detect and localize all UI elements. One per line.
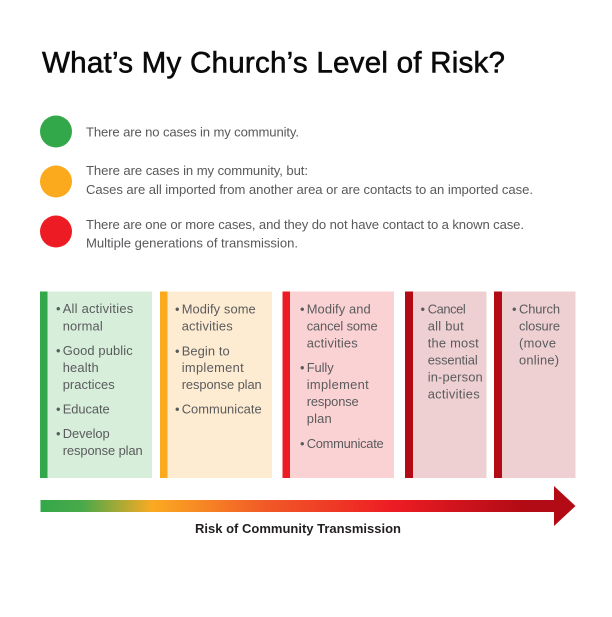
cancel panel list: Cancel <box>428 302 466 316</box>
closure panel list: online) <box>519 353 559 368</box>
legend: red level <box>40 216 524 251</box>
closure panel list: • <box>512 302 517 316</box>
orange panel list: Modify some <box>182 302 256 316</box>
closure panel list: Church <box>519 302 560 316</box>
red panel list: • <box>300 302 305 316</box>
green panel list: • <box>56 426 61 441</box>
orange panel list: • <box>175 344 180 358</box>
red panel list: response <box>307 394 359 409</box>
red level description: Multiple generations of transmission. <box>86 236 298 251</box>
cancel panel list: in-person <box>428 370 483 385</box>
orange panel list: activities <box>182 319 233 334</box>
red panel list: implement <box>307 377 369 392</box>
green panel list: normal <box>63 318 103 334</box>
cancel panel list: essential <box>428 353 478 368</box>
icon: red circle <box>40 216 72 248</box>
red panel list: • <box>300 436 305 451</box>
green panel list: Good public <box>63 343 133 358</box>
orange panel list: • <box>175 302 180 316</box>
green level description: There are no cases in my community. <box>86 124 299 140</box>
green panel list: practices <box>63 377 115 392</box>
orange panel list: response plan <box>182 377 262 392</box>
orange level description: There are cases in my community, but: <box>86 163 308 178</box>
closure panel list <box>512 302 560 368</box>
green panel list: • <box>56 402 61 416</box>
cancel panel list: the most <box>428 336 479 351</box>
panel: green response <box>40 292 152 478</box>
orange level description <box>86 163 533 197</box>
cancel panel list: all but <box>428 319 464 334</box>
green panel list: • <box>56 301 61 316</box>
green panel list: • <box>56 343 61 358</box>
green panel list: Educate <box>63 402 110 416</box>
orange panel list: Communicate <box>182 402 262 416</box>
red panel list: • <box>300 360 305 375</box>
red panel list: Modify and <box>307 302 371 316</box>
orange panel list: • <box>175 402 180 416</box>
closure panel list: (move <box>519 336 556 351</box>
red panel list: plan <box>307 411 332 426</box>
orange panel list: Begin to <box>182 344 230 358</box>
panel: orange response <box>160 292 272 478</box>
green panel list: health <box>63 360 99 375</box>
green panel list <box>56 301 143 458</box>
arrow label: Risk of Community Transmission <box>195 521 401 536</box>
cancel panel list: • <box>420 302 425 316</box>
red level description <box>86 217 524 251</box>
panel: dark red response, cancel <box>405 292 486 478</box>
legend: orange level <box>40 163 533 198</box>
red panel list: Fully <box>307 360 334 375</box>
green panel list: Develop <box>63 426 110 441</box>
cancel panel list: activities <box>428 387 480 402</box>
icon: orange circle <box>40 166 72 198</box>
title: What’s My Church’s Level of Risk? <box>42 46 505 80</box>
legend: green level <box>40 116 299 148</box>
panel: red response <box>282 292 394 478</box>
red panel list <box>300 302 384 451</box>
orange level description: Cases are all imported from another area or are contacts to an imported case. <box>86 182 533 197</box>
green panel list: All activities <box>63 301 133 316</box>
orange panel list: implement <box>182 360 244 375</box>
red level description: There are one or more cases, and they do not have contact to a known case. <box>86 217 524 232</box>
closure panel list: closure <box>519 319 560 334</box>
red panel list: activities <box>307 336 358 351</box>
icon: green circle <box>40 116 72 148</box>
arrow: risk gradient <box>40 486 576 526</box>
cancel panel list <box>420 302 483 402</box>
green panel list: response plan <box>63 443 143 458</box>
red panel list: Communicate <box>307 436 384 451</box>
panel: dark red response, closure <box>494 292 576 478</box>
red panel list: cancel some <box>307 319 378 334</box>
orange panel list <box>175 302 262 416</box>
